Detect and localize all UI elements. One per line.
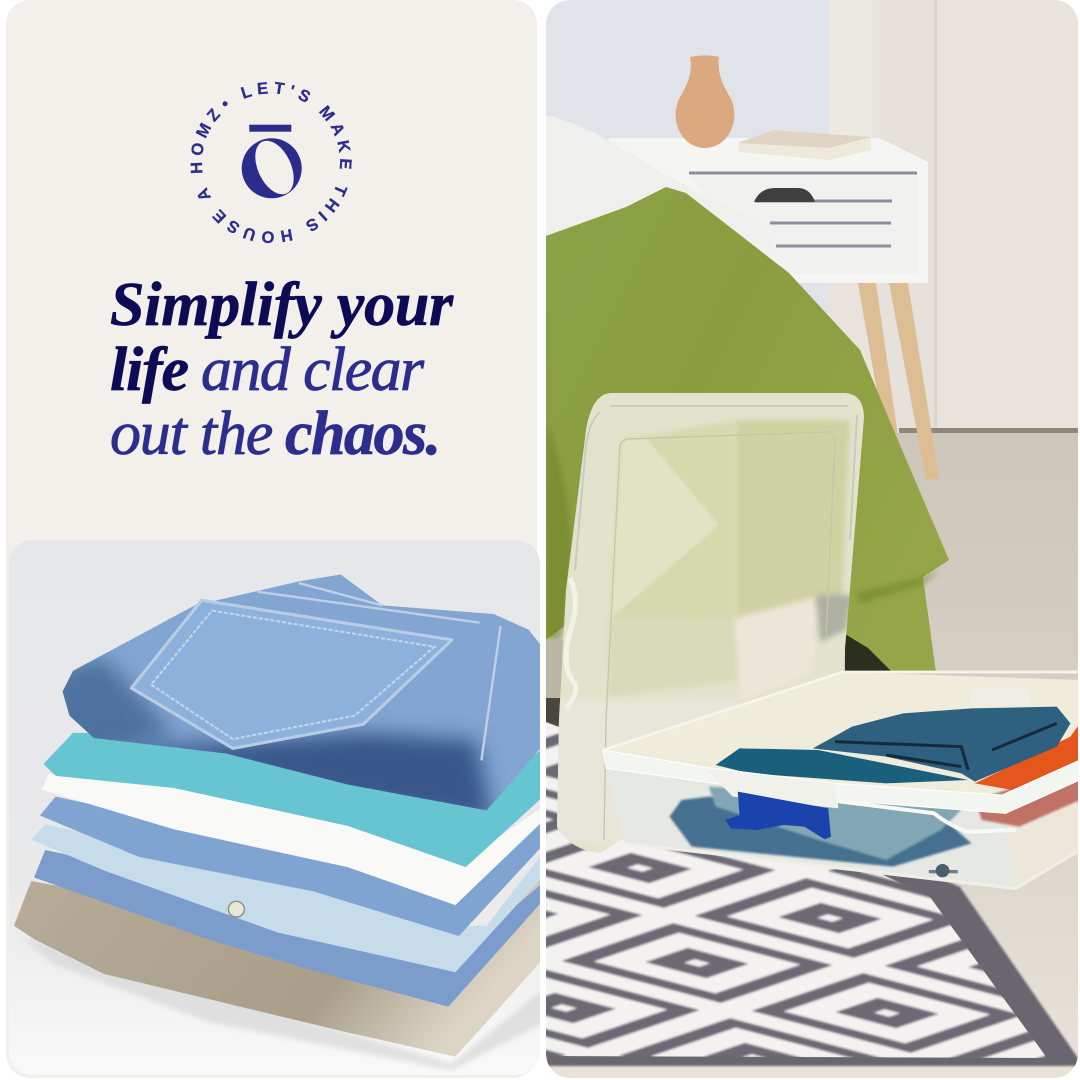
vase	[676, 56, 734, 148]
headline line 2 bold: life	[110, 336, 188, 404]
jeans detail	[835, 723, 1057, 770]
red fabric through front	[975, 767, 1080, 827]
floor dark gap	[546, 698, 560, 726]
pale area through lid	[736, 597, 816, 702]
photo: folded clothes stack	[9, 540, 545, 1075]
folded dark jeans	[813, 707, 1070, 782]
jeans pocket	[131, 600, 452, 748]
nightstand	[600, 138, 928, 283]
logo mark: o with macron	[242, 125, 302, 200]
storage lid	[555, 393, 864, 853]
headline line 2 regular: and clear	[201, 336, 425, 404]
grey shadow through lid	[816, 595, 853, 642]
table shadow	[21, 936, 545, 1070]
lid inner frame	[604, 432, 835, 840]
headline line 1: Simplify your	[110, 271, 454, 339]
lid central band	[735, 420, 850, 625]
box rim	[603, 750, 1080, 813]
blanket fold through lid	[609, 438, 719, 620]
shirt button	[228, 901, 244, 917]
rim back	[603, 672, 1080, 750]
circular tagline: • LET'S MAKE THIS HOUSE A HOMZ	[190, 82, 352, 244]
floor patch left	[546, 640, 564, 698]
wardrobe door	[828, 0, 1078, 433]
headline line 3 regular: out the	[110, 400, 273, 468]
lid handle	[566, 578, 576, 708]
pillow	[546, 115, 626, 236]
green blanket	[546, 187, 949, 673]
floor	[546, 433, 1078, 1080]
rug pattern	[546, 722, 1046, 1058]
blanket folds	[546, 420, 940, 640]
white shirt	[42, 774, 545, 905]
far latch	[972, 688, 1030, 705]
storage box	[603, 672, 1080, 888]
orange fabric	[975, 723, 1080, 790]
panel: left cream background	[6, 0, 537, 1078]
logo badge	[190, 82, 352, 244]
pale lower fabric	[709, 787, 968, 860]
khaki trousers	[14, 867, 545, 1057]
box front face	[606, 768, 1016, 888]
blue button shirt	[34, 850, 545, 1007]
front latch	[705, 768, 838, 808]
blue clasp	[725, 792, 831, 839]
dark gap under blanket	[845, 634, 892, 672]
photo: bedroom with storage box	[500, 0, 1080, 1080]
headline line 3 bold: chaos.	[285, 400, 440, 468]
box interior	[603, 672, 1080, 812]
jeans waistband	[257, 583, 501, 760]
headline	[110, 271, 454, 468]
clothes through front	[670, 797, 972, 867]
box right face	[1006, 780, 1080, 888]
rug	[546, 722, 1078, 1068]
denim jeans	[49, 574, 545, 822]
book	[738, 130, 871, 160]
lower lid pale	[555, 700, 740, 845]
mid blue shirt	[40, 797, 545, 936]
front lower edge	[625, 843, 1080, 888]
jeans dark shading	[87, 733, 494, 822]
pocket stitching	[151, 611, 435, 739]
teal top fabric	[716, 748, 968, 783]
lid left panel	[609, 420, 735, 625]
lower fabric through lid	[608, 624, 738, 696]
pale blue shirt	[31, 824, 545, 972]
nightstand legs	[858, 283, 939, 480]
wall	[546, 0, 899, 433]
jeans left shade	[62, 652, 176, 745]
wheel	[929, 864, 958, 877]
teal shirt	[43, 733, 545, 867]
handle curve	[828, 800, 1016, 832]
lid rim highlights	[575, 406, 857, 570]
